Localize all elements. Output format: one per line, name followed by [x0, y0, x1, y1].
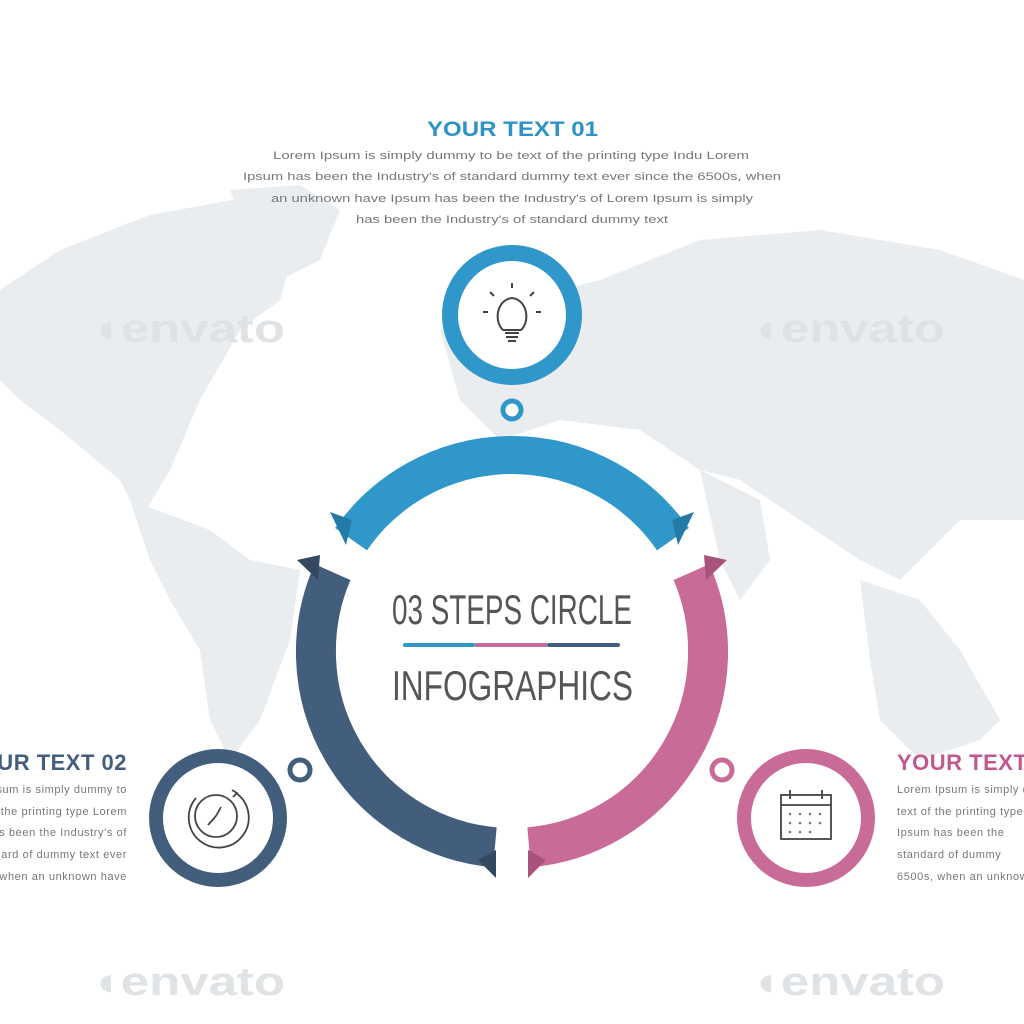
title: your text 01: YOUR TEXT 01	[427, 118, 598, 141]
center title: 03 STEPS CIRCLE	[392, 586, 632, 633]
segment: pink right	[529, 572, 708, 847]
title: your text 01: Ipsum has been the Industry's of standard dummy text ever since the 6500s, when	[243, 171, 781, 183]
title: your text 01: Lorem Ipsum is simply dummy to be text of the printing type Indu Lorem	[273, 150, 749, 162]
segment: dark blue left	[316, 572, 495, 847]
icon circle: calendar	[744, 756, 868, 880]
world map background	[0, 185, 1024, 760]
text block 03 (right)	[897, 750, 1024, 883]
center circle	[336, 474, 688, 826]
title: your text 01	[243, 118, 781, 226]
connector rings	[290, 401, 732, 780]
title: your text 01: has been the Industry's of standard dummy text	[356, 214, 668, 226]
text block 02 (left)	[0, 750, 127, 883]
center title	[392, 586, 633, 709]
center title: INFOGRAPHICS	[392, 662, 633, 709]
watermarks	[90, 307, 945, 1004]
icon circle: clock	[156, 756, 280, 880]
central ring with three segments	[316, 456, 708, 847]
text block 03 (right): Ipsum has been the	[897, 827, 1004, 839]
watermarks: ◖envato	[750, 307, 945, 351]
text block 03 (right): standard of dummy	[897, 849, 1001, 861]
text block 03 (right): text of the printing type	[897, 806, 1023, 818]
segment tabs	[297, 512, 727, 878]
icon circle: lightbulb	[450, 253, 574, 377]
watermarks: ◖envato	[90, 307, 285, 351]
title: your text 01: an unknown have Ipsum has been the Industry's of Lorem Ipsum is simply	[271, 193, 754, 205]
segment: blue top	[352, 456, 672, 540]
watermarks: ◖envato	[750, 960, 945, 1004]
watermarks: ◖envato	[90, 960, 285, 1004]
